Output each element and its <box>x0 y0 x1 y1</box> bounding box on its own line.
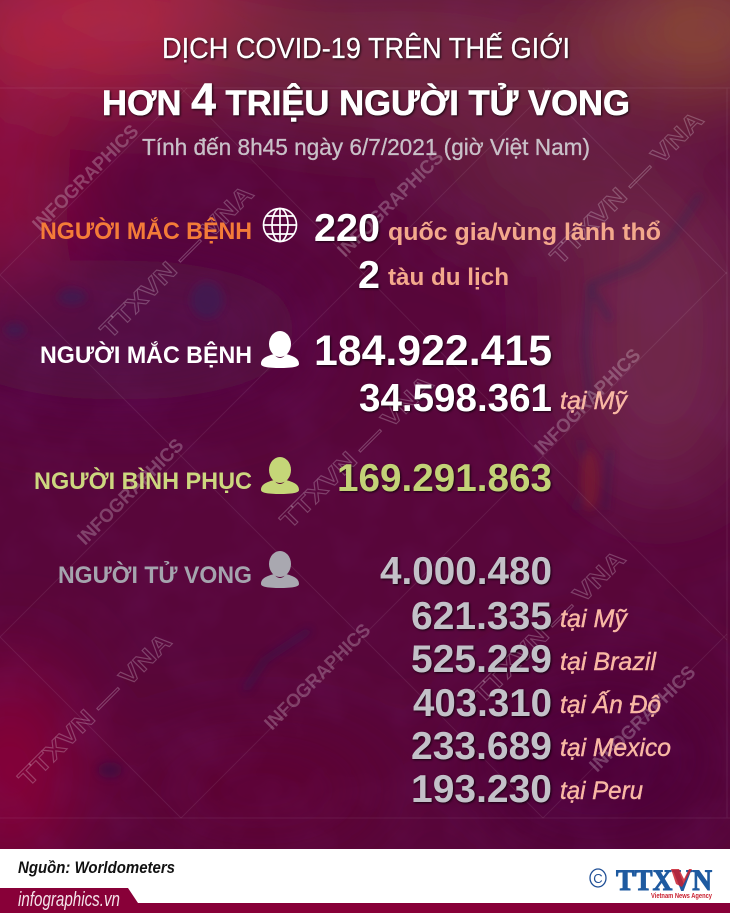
icon: white person <box>261 331 299 368</box>
India deaths: tại Ấn Độ <box>560 689 661 719</box>
Peru deaths <box>411 768 643 811</box>
watermarks: INFOGRAPHICS <box>74 435 188 550</box>
footer white panel <box>0 849 730 913</box>
copyright mark: C <box>593 871 603 886</box>
number: total deaths: 4.000.480 <box>380 550 552 593</box>
row: recovered <box>34 457 552 500</box>
Brazil deaths <box>411 638 657 681</box>
text: cruise ships note: tàu du lịch <box>388 264 509 291</box>
label: cases heading: NGƯỜI MẮC BỆNH <box>40 341 252 369</box>
label: territories heading: NGƯỜI MẮC BỆNH <box>40 217 252 245</box>
wordmark: TTXVN <box>616 864 712 897</box>
watermarks: TTXVN — VNA <box>545 106 709 270</box>
Brazil deaths: tại Brazil <box>560 648 657 676</box>
watermarks: TTXVN — VNA <box>13 628 177 792</box>
label: recovered heading: NGƯỜI BÌNH PHỤC <box>34 467 252 495</box>
US deaths: tại Mỹ <box>560 605 628 633</box>
watermarks: INFOGRAPHICS <box>334 147 448 262</box>
watermarks: INFOGRAPHICS <box>586 662 700 777</box>
India deaths <box>413 682 661 725</box>
icon: globe <box>264 208 296 242</box>
Mexico deaths: tại Mexico <box>560 734 671 762</box>
US deaths: 621.335 <box>411 595 552 638</box>
main title: HƠN 4 TRIỆU NGƯỜI TỬ VONG <box>102 74 630 125</box>
Peru deaths: 193.230 <box>411 768 552 811</box>
watermarks: TTXVN — VNA <box>95 180 259 344</box>
title block <box>102 31 630 160</box>
footer <box>0 849 730 913</box>
Brazil deaths: 525.229 <box>411 638 552 681</box>
label: deaths heading: NGƯỜI TỬ VONG <box>58 560 252 589</box>
list: deaths by country <box>411 595 671 811</box>
watermarks: INFOGRAPHICS <box>29 121 143 236</box>
date subtitle: Tính đến 8h45 ngày 6/7/2021 (giờ Việt Nam) <box>142 134 590 160</box>
US deaths <box>411 595 628 638</box>
number: 220 territories: 220 <box>314 207 380 250</box>
text: in the US: tại Mỹ <box>560 387 628 415</box>
source text: Nguồn: Worldometers <box>18 858 175 877</box>
logo: TTXVN <box>590 864 712 900</box>
footer bottom band <box>0 888 730 913</box>
title line 1: DỊCH COVID-19 TRÊN THẾ GIỚI <box>162 31 570 65</box>
text: territories note: quốc gia/vùng lãnh thổ <box>388 219 661 246</box>
Peru deaths: tại Peru <box>560 777 643 805</box>
watermarks: TTXVN — VNA <box>275 370 439 534</box>
number: recovered: 169.291.863 <box>337 457 552 500</box>
watermarks: TTXVN — VNA <box>467 545 631 709</box>
watermarks <box>13 106 709 792</box>
Mexico deaths <box>411 725 671 768</box>
Mexico deaths: 233.689 <box>411 725 552 768</box>
watermarks: INFOGRAPHICS <box>261 620 375 735</box>
row: territories <box>40 207 661 297</box>
number: total cases: 184.922.415 <box>314 327 552 375</box>
background lattice lines <box>0 88 730 818</box>
India deaths: 403.310 <box>413 682 552 725</box>
icon: green person <box>261 457 299 494</box>
red V accent <box>671 869 692 887</box>
watermarks: INFOGRAPHICS <box>531 345 645 460</box>
website text: infographics.vn <box>18 889 120 911</box>
row: cases <box>40 327 628 420</box>
agency tagline: Vietnam News Agency <box>651 893 712 900</box>
number: US cases: 34.598.361 <box>359 377 552 420</box>
number: 2 cruise ships: 2 <box>358 254 380 297</box>
row: deaths <box>58 550 671 811</box>
icon: grey person <box>261 551 299 588</box>
